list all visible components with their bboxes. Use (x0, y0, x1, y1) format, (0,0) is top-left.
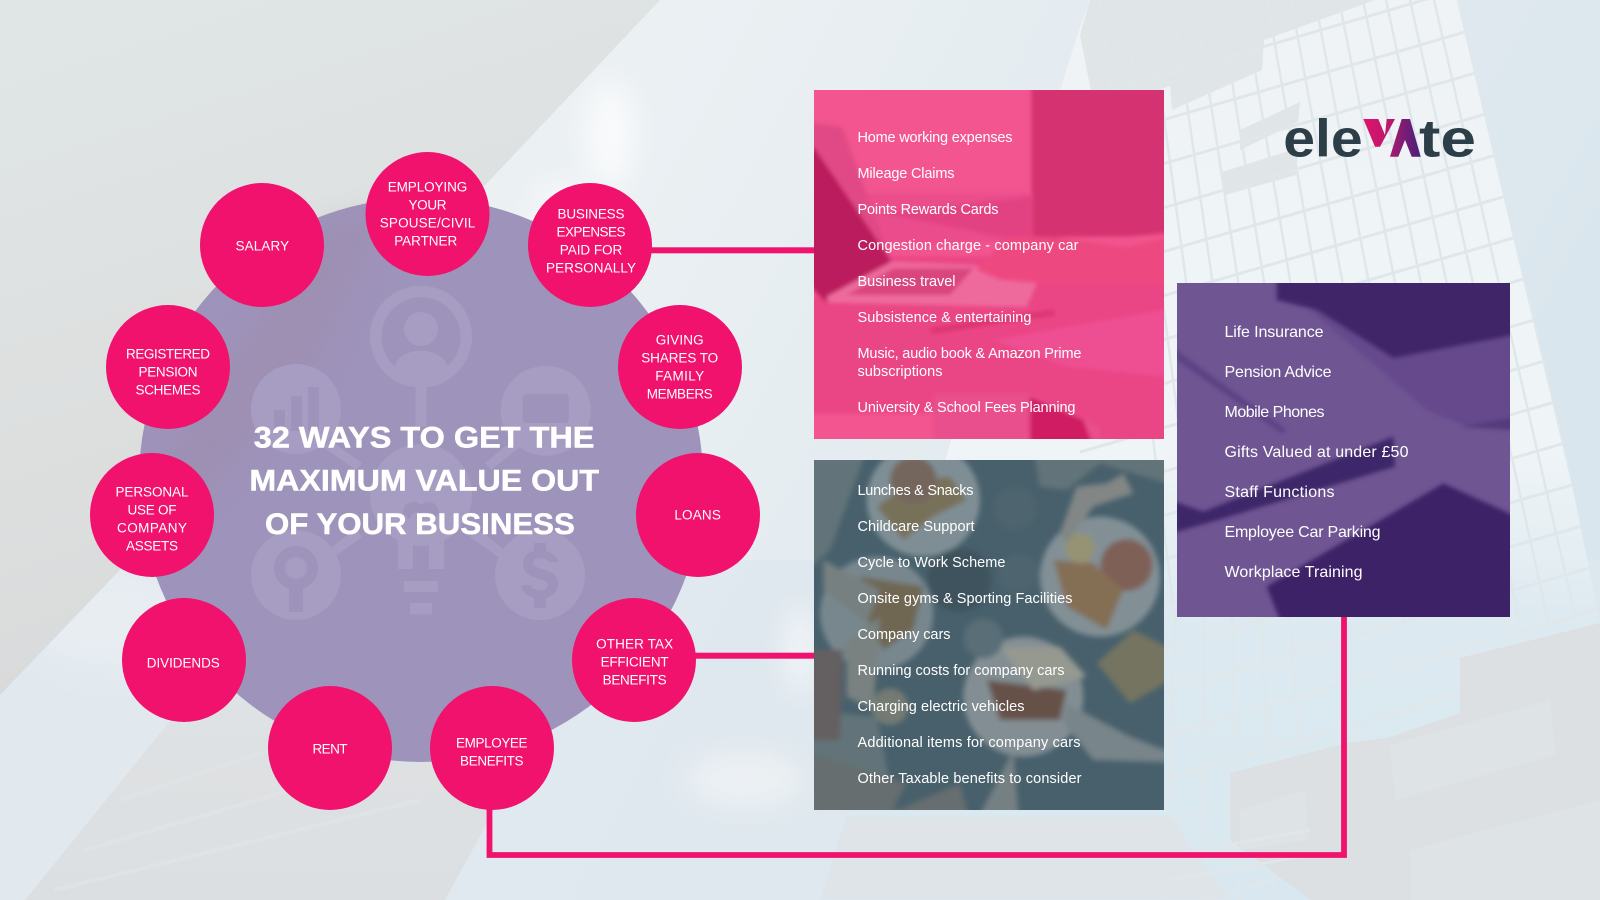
list: food panel items: Company cars (858, 627, 950, 643)
circle: dividends (122, 598, 246, 722)
title: MAXIMUM VALUE OUT (249, 465, 599, 498)
circle: employing your spouse: SPOUSE/CIVIL (380, 216, 476, 231)
circle: employee benefits: EMPLOYEE (456, 736, 528, 751)
logo mark: inverted V (1390, 119, 1421, 157)
list: pink panel items: Home working expenses (858, 130, 1012, 146)
circle: registered pension schemes: REGISTERED (126, 346, 210, 361)
circle: other tax efficient benefits (572, 598, 696, 722)
title: 32 WAYS TO GET THE (254, 422, 594, 455)
panel: business expenses (pink laptop photo) (814, 90, 1164, 439)
circle: registered pension schemes (106, 305, 230, 429)
circle: giving shares: MEMBERS (647, 386, 713, 401)
circle: business expenses: PAID FOR (560, 242, 622, 257)
circle: other tax efficient benefits: OTHER TAX (596, 637, 673, 652)
list: food panel items: Additional items for company cars (858, 735, 1080, 751)
title (249, 422, 599, 541)
circle: salary: SALARY (236, 238, 289, 254)
circle: giving shares: GIVING (656, 332, 704, 347)
circle: employee benefits (430, 686, 554, 810)
list: pink panel items: Subsistence & entertaining (858, 310, 1032, 326)
circle: rent (268, 686, 392, 810)
central purple circle (139, 198, 703, 762)
circle: personal use of company assets: USE OF (128, 503, 176, 518)
circle: employing your spouse: PARTNER (394, 234, 457, 249)
list: food panel items: Onsite gyms & Sporting Facilities (858, 591, 1072, 607)
circle: giving shares: SHARES TO (641, 350, 718, 365)
list: food panel items: Lunches & Snacks (858, 483, 974, 499)
list: pink panel items: Mileage Claims (858, 166, 954, 182)
icon: key bubble (251, 528, 362, 620)
icon: dollar bubble (470, 528, 585, 620)
title: OF YOUR BUSINESS (265, 508, 575, 541)
list: food panel items: Charging electric vehicles (858, 699, 1024, 715)
connector: employee benefits to purple panel (490, 610, 1344, 855)
panel: other tax efficient benefits (food photo) (814, 460, 1164, 810)
list: pink panel items: Business travel (858, 274, 956, 290)
logo mark: V (1363, 119, 1395, 147)
circle: giving shares: FAMILY (655, 368, 704, 383)
list: food panel items (858, 483, 1082, 787)
list: food panel items: Running costs for company cars (858, 663, 1064, 679)
connector: business expenses to pink panel (645, 247, 815, 253)
list: purple panel items: Gifts Valued at under £50 (1224, 444, 1409, 461)
list: purple panel items: Staff Functions (1224, 484, 1334, 501)
icon: message bubble (485, 366, 591, 470)
list: pink panel items: University & School Fees Planning (858, 400, 1076, 416)
list: pink panel items: subscriptions (858, 364, 942, 380)
circle: registered pension schemes: SCHEMES (136, 382, 200, 397)
circle: other tax efficient benefits: BENEFITS (603, 673, 667, 688)
icon: lightbulb (370, 444, 472, 614)
circle: loans: LOANS (674, 507, 721, 522)
list: food panel items: Other Taxable benefits to consider (858, 771, 1082, 787)
list: pink panel items: Congestion charge - company car (858, 238, 1079, 254)
circle: personal use of company assets: ASSETS (126, 539, 178, 554)
circle: employing your spouse: EMPLOYING (388, 180, 467, 195)
faint building tint in circle (150, 215, 380, 500)
list: food panel items: Childcare Support (858, 519, 974, 535)
icon: bar chart bubble (251, 364, 362, 470)
circle: registered pension schemes: PENSION (138, 364, 198, 379)
panel: employee benefits (purple desk photo) (1177, 283, 1510, 617)
list: purple panel items: Employee Car Parking (1224, 524, 1380, 541)
list: pink panel items: Music, audio book & Amazon Prime (858, 346, 1082, 362)
circle: salary (200, 183, 324, 307)
connector: other tax efficient benefits to food panel (690, 653, 815, 659)
circle: business expenses: BUSINESS (558, 206, 624, 221)
circle: employing your spouse (366, 152, 490, 276)
background icons in circle (251, 286, 591, 620)
list: purple panel items (1224, 324, 1409, 581)
circle: employee benefits: BENEFITS (460, 754, 524, 769)
circle: dividends: DIVIDENDS (147, 656, 220, 671)
circle: business expenses (528, 183, 652, 307)
list: purple panel items: Pension Advice (1224, 364, 1332, 381)
circle: loans (636, 453, 760, 577)
list: purple panel items: Mobile Phones (1224, 404, 1324, 421)
list: food panel items: Cycle to Work Scheme (858, 555, 1006, 571)
circle: giving shares (618, 305, 742, 429)
circle: personal use of company assets (90, 453, 214, 577)
circle: other tax efficient benefits: EFFICIENT (601, 655, 669, 670)
icon: person magnifier (370, 286, 472, 427)
circle: personal use of company assets: PERSONAL (116, 485, 189, 500)
circle: business expenses: EXPENSES (556, 224, 626, 239)
logo: elevate: ele (1283, 110, 1363, 168)
list: purple panel items: Life Insurance (1224, 324, 1324, 341)
circle: personal use of company assets: COMPANY (117, 521, 187, 536)
list: pink panel items: Points Rewards Cards (858, 202, 998, 218)
logo: elevate: te (1419, 110, 1476, 168)
circle: business expenses: PERSONALLY (546, 260, 636, 275)
circle: employing your spouse: YOUR (408, 198, 447, 213)
circle: rent: RENT (312, 742, 348, 757)
logo: elevate (1283, 110, 1476, 168)
list: purple panel items: Workplace Training (1224, 564, 1362, 581)
list: pink panel items (858, 130, 1082, 416)
